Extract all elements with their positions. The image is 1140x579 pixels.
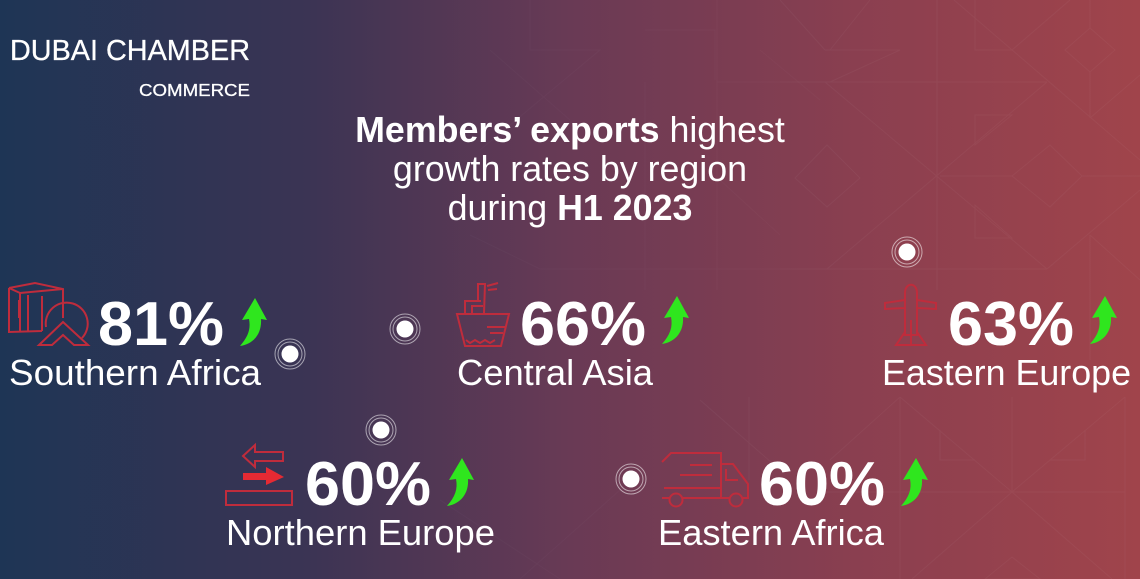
arrow up	[662, 296, 689, 344]
stat: Northern Europe	[226, 445, 495, 553]
value: 63%	[948, 290, 1074, 359]
value: 66%	[520, 290, 646, 359]
label: Eastern Africa	[658, 512, 885, 553]
icon: exchange arrows	[226, 445, 292, 505]
value: 60%	[759, 450, 885, 519]
logo	[10, 35, 250, 100]
title: during H1 2023	[448, 188, 692, 228]
stat: Southern Africa	[9, 283, 267, 393]
label: Eastern Europe	[882, 352, 1131, 393]
icon: airplane	[885, 285, 936, 345]
arrow up	[1090, 296, 1117, 344]
title	[355, 110, 785, 228]
arrow up	[447, 458, 474, 506]
marker dot	[390, 314, 420, 344]
marker dot	[616, 464, 646, 494]
marker dot	[892, 237, 922, 267]
icon: truck	[662, 453, 748, 506]
title: Members’ exports highest	[355, 110, 785, 150]
stat: Central Asia	[457, 283, 689, 393]
marker dot	[275, 339, 305, 369]
value: 60%	[305, 450, 431, 519]
value: 81%	[98, 290, 224, 359]
icon: ship	[457, 283, 509, 346]
marker dot	[366, 415, 396, 445]
label: Central Asia	[457, 352, 654, 393]
arrow up	[240, 298, 267, 346]
label: Northern Europe	[226, 512, 495, 553]
background pattern	[440, 0, 1140, 579]
logo subtitle: COMMERCE	[139, 80, 250, 100]
logo wordmark: DUBAI CHAMBER	[10, 35, 250, 67]
stat: Eastern Europe	[882, 285, 1131, 393]
title: growth rates by region	[393, 149, 747, 189]
arrow up	[901, 458, 928, 506]
icon: box and upload	[9, 283, 88, 345]
label: Southern Africa	[9, 352, 262, 393]
stat: Eastern Africa	[658, 450, 928, 553]
